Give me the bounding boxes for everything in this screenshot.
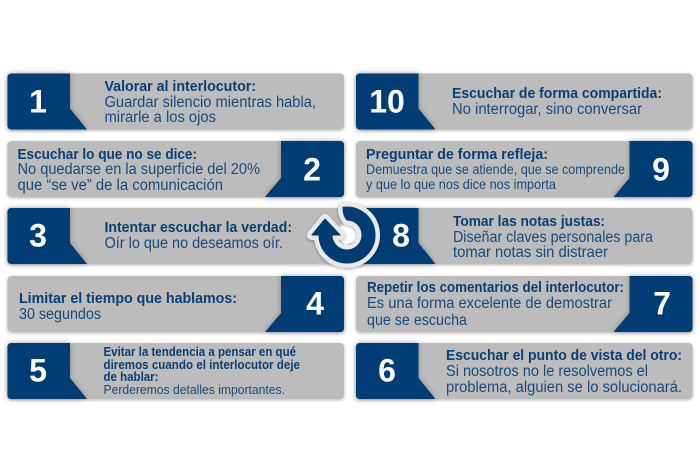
panel: 7 repetir los comentarios [356, 276, 692, 332]
panel: 8 tomar las notas justas: 8 [392, 218, 410, 254]
panel: 9 preguntar de forma refleja: Preguntar de forma refleja: [366, 146, 548, 163]
panel: 8 tomar las notas justas: tomar notas sin distraer [453, 244, 608, 261]
panel: 10 escuchar de forma compartida: 10 [369, 84, 405, 120]
panel: 6 escuchar el punto de vista: Si nosotros no le resolvemos el [446, 363, 648, 380]
panel: 5 evitar la tendencia: Evitar la tendencia a pensar en qué [104, 345, 296, 359]
panel: 5 evitar la tendencia: 5 [29, 352, 47, 388]
panel: 5 evitar la tendencia [8, 343, 344, 399]
panel: 2 escuchar lo que no se dice [8, 141, 344, 197]
panel: 8 tomar las notas justas: Tomar las notas justas: [453, 213, 605, 230]
panel: 10 escuchar de forma compartida: Escuchar de forma compartida: [452, 85, 662, 102]
panel: 6 escuchar el punto de vista: problema, alguien se lo solucionará. [446, 379, 682, 396]
panel: 1 valorar al interlocutor [8, 74, 344, 130]
panel: 3 intentar escuchar la verdad: Intentar escuchar la verdad: [104, 219, 292, 236]
panel: 3 intentar escuchar la verdad: 3 [29, 218, 47, 254]
panel: 5 evitar la tendencia: Perderemos detalles importantes. [104, 382, 285, 397]
panel: 7 repetir los comentarios: que se escucha [367, 312, 467, 329]
panel: 9 preguntar de forma refleja: 9 [652, 152, 670, 188]
panel: 6 escuchar el punto de vista: Escuchar el punto de vista del otro: [446, 347, 682, 364]
panel: 7 repetir los comentarios: 7 [653, 286, 671, 322]
panel: 7 repetir los comentarios: Repetir los comentarios del interlocutor: [367, 279, 624, 296]
panel: 8 tomar las notas justas: Diseñar claves personales para [453, 229, 653, 246]
panel: 9 preguntar de forma refleja [356, 141, 692, 197]
panel: 1 valorar al interlocutor: Valorar al interlocutor: [104, 78, 256, 95]
panel: 4 limitar el tiempo: 4 [306, 286, 324, 322]
panel: 2 escuchar lo que no se dice: No quedarse en la superficie del 20% [18, 161, 260, 178]
panel: 9 preguntar de forma refleja: Demuestra que se atiende, que se comprende [366, 161, 625, 177]
panel: 1 valorar al interlocutor: 1 [29, 84, 47, 120]
panel: 4 limitar el tiempo: Limitar el tiempo que hablamos: [19, 290, 237, 307]
panel: 3 intentar escuchar la verdad [8, 208, 344, 264]
panel: 6 escuchar el punto de vista [356, 343, 692, 399]
panel: 10 escuchar de forma compartida: No interrogar, sino conversar [452, 101, 642, 118]
icon: circular arrow [312, 207, 375, 263]
panel: 4 limitar el tiempo: 30 segundos [19, 306, 101, 323]
panel: 8 tomar las notas justas [348, 208, 692, 264]
panel: 7 repetir los comentarios: Es una forma excelente de demostrar [367, 295, 612, 312]
panel: 5 evitar la tendencia: diremos cuando el interlocutor deje [104, 358, 300, 372]
panel: 4 limitar el tiempo [8, 276, 344, 332]
panel: 5 evitar la tendencia: de hablar: [104, 370, 158, 384]
panel: 1 valorar al interlocutor: mirarle a los ojos [104, 109, 216, 126]
panel: 2 escuchar lo que no se dice: Escuchar lo que no se dice: [18, 146, 197, 163]
panel: 2 escuchar lo que no se dice: 2 [303, 152, 321, 188]
panel: 10 escuchar de forma compartida [356, 74, 692, 130]
panel: 3 intentar escuchar la verdad: Oír lo que no deseamos oír. [104, 235, 283, 252]
panel: 2 escuchar lo que no se dice: que “se ve” de la comunicación [18, 177, 223, 194]
panel: 6 escuchar el punto de vista: 6 [378, 352, 396, 388]
panel: 9 preguntar de forma refleja: y que lo que nos dice nos importa [366, 176, 556, 192]
panel: 1 valorar al interlocutor: Guardar silencio mientras habla, [104, 94, 316, 111]
